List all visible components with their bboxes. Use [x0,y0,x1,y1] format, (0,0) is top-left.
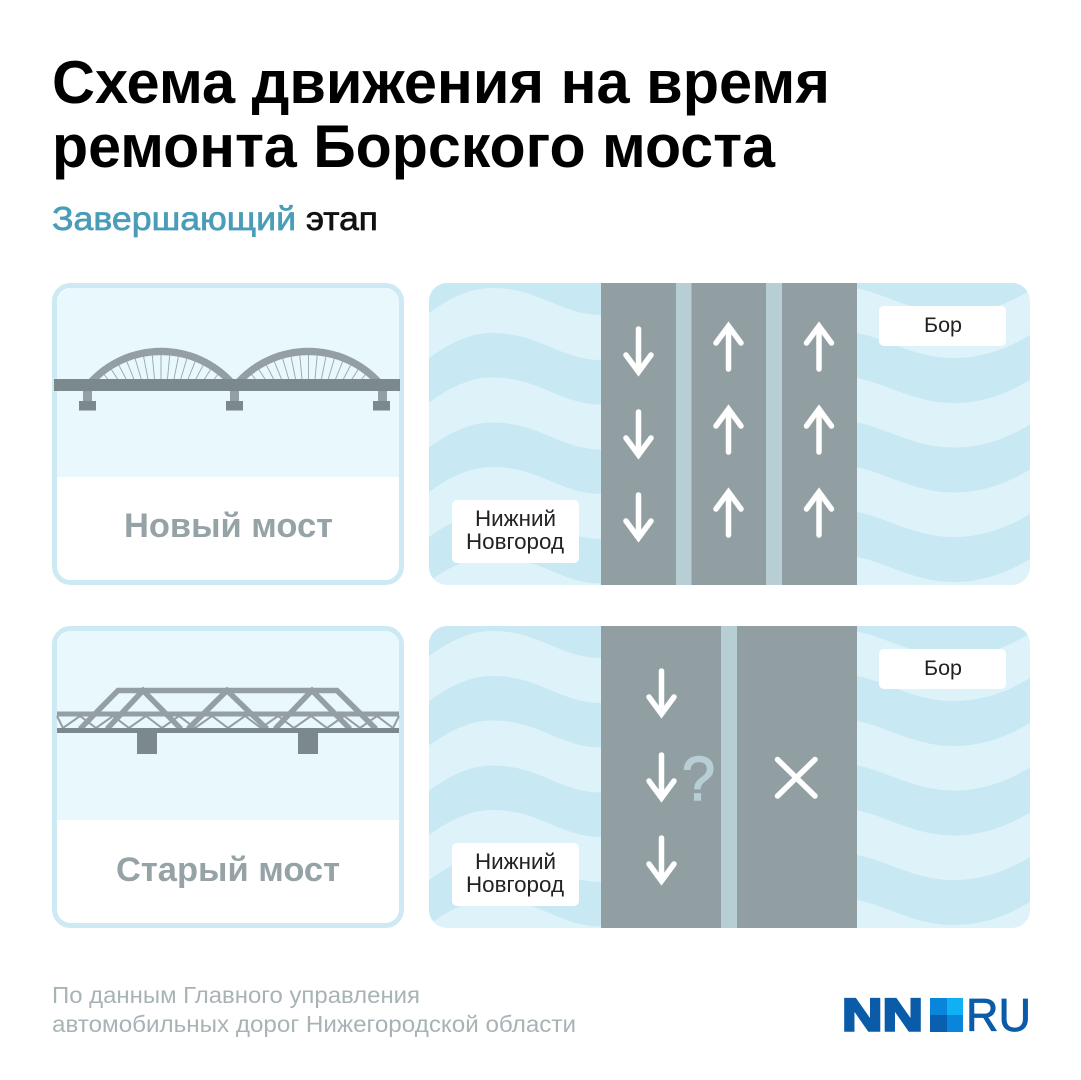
water [429,244,1030,585]
road [601,283,857,585]
subtitle [52,200,378,237]
icon: question mark: ? [682,745,715,814]
arrows: lanes toward Bor [716,326,832,535]
icon: old truss bridge [57,690,399,754]
logo: NN.RU [842,989,1031,1041]
road [601,626,857,928]
label: Nizhny Novgorod: Нижний [475,506,556,531]
panel: new bridge card [54,286,402,582]
arrows: lanes toward Nizhny Novgorod [626,329,651,538]
label: Nizhny Novgorod: Новгород [466,529,564,554]
label: Nizhny Novgorod: Новгород [466,872,564,897]
title: Схема движения на время [52,49,830,116]
title: ремонта Борского моста [52,113,776,180]
panel: old bridge traffic scheme [429,586,1030,928]
title [52,49,830,180]
icon: closed lane cross [778,760,815,796]
label: Nizhny Novgorod [452,500,579,563]
label: Nizhny Novgorod: Нижний [475,849,556,874]
panel: new bridge traffic scheme [429,244,1030,585]
label: Bor: Бор [924,657,962,680]
logo: NN.RU: NN [842,990,923,1040]
label: new bridge: Новый мост [124,507,333,545]
label: Nizhny Novgorod [452,843,579,906]
label: Bor [879,649,1006,689]
arrows: open lane [649,671,674,881]
source note: По данным Главного управления [52,982,420,1008]
panel: old bridge card [54,628,402,926]
logo: NN.RU: RU [966,989,1031,1041]
label: Bor: Бор [924,314,962,337]
source note [52,982,576,1037]
label: old bridge: Старый мост [116,851,340,889]
source note: автомобильных дорог Нижегородской области [52,1011,576,1037]
subtitle: Завершающий [52,200,296,237]
subtitle: этап [306,200,378,237]
water [429,586,1030,928]
icon: new arch bridge [54,348,400,410]
label: Bor [879,306,1006,346]
